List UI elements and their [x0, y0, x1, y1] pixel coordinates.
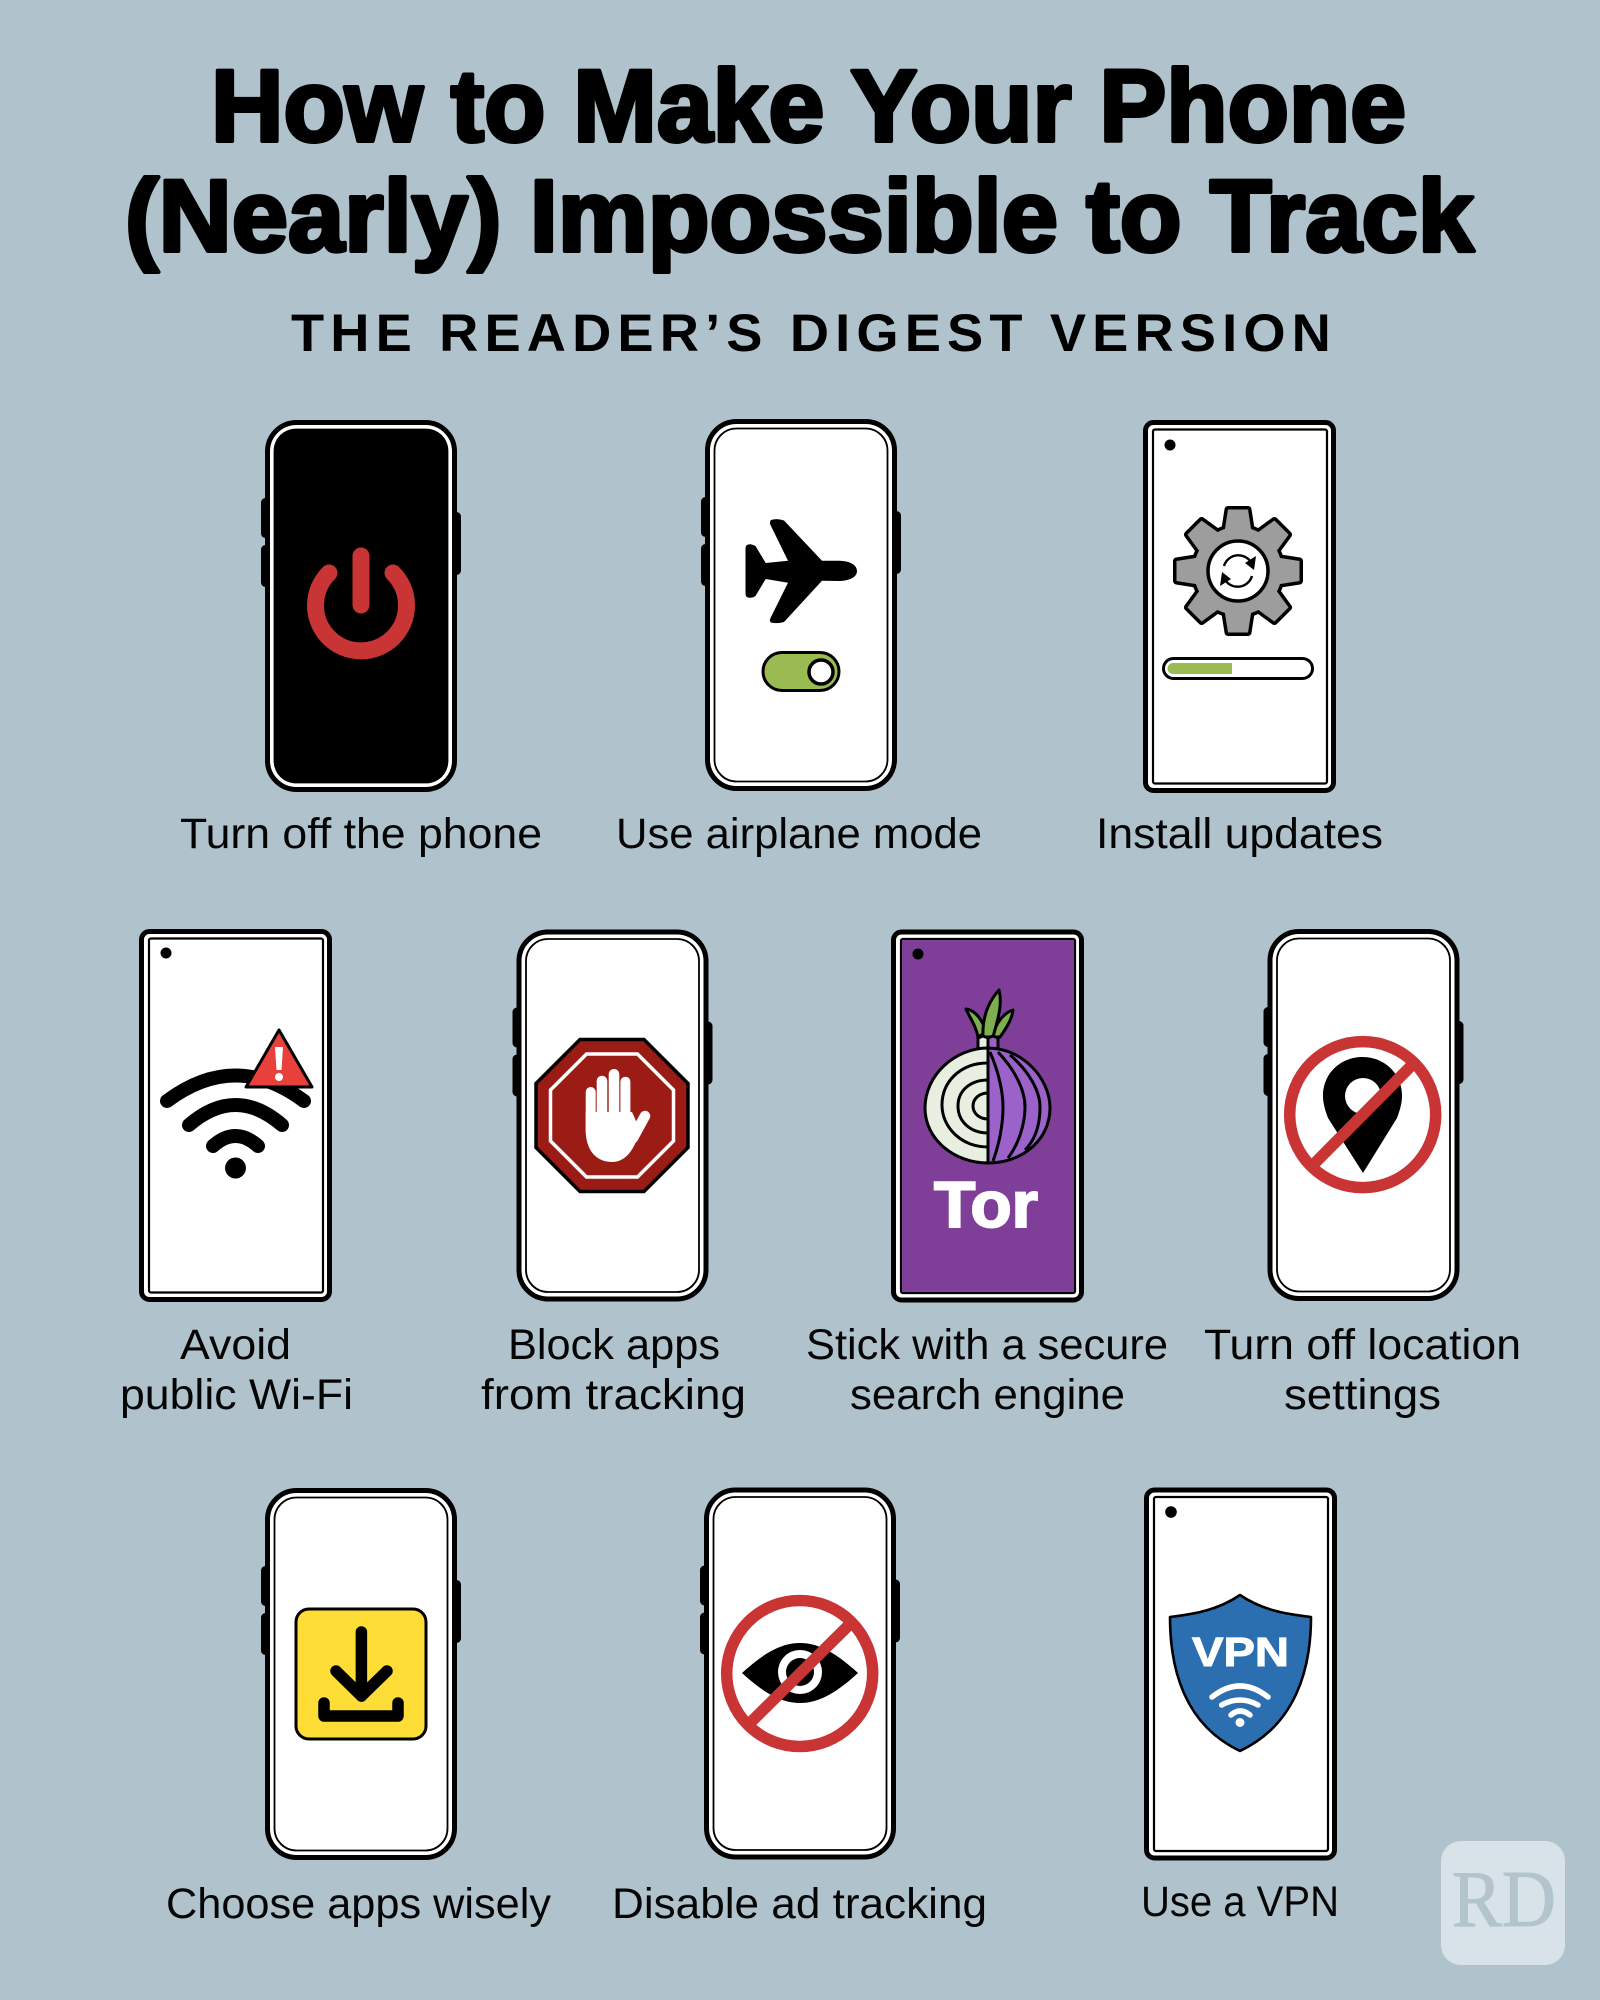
caption: [120, 1321, 353, 1419]
logo: RD: [1441, 1841, 1565, 1965]
panel: disable ad tracking: [612, 1490, 987, 1928]
caption: Use airplane mode: [616, 810, 982, 858]
caption: Turn off location: [1204, 1321, 1521, 1369]
Tor wordmark: Tor: [934, 1168, 1038, 1241]
caption: Turn off the phone: [180, 810, 542, 858]
logo: RD: RD: [1452, 1856, 1556, 1944]
title: [125, 49, 1474, 273]
icon: toggle switch: [763, 652, 839, 690]
panel: use airplane mode: [616, 422, 982, 858]
icon: airplane: [746, 519, 857, 623]
panel: choose apps wisely: [166, 1490, 551, 1928]
icon: onion: [925, 990, 1050, 1163]
caption: Install updates: [1096, 810, 1383, 858]
icon: prohibition sign: [1290, 1042, 1436, 1188]
phone purple screen: [901, 939, 1075, 1293]
phone frame: [261, 1490, 461, 1858]
icon: white hand: [586, 1069, 645, 1162]
icon: vpn shield: [1170, 1595, 1311, 1751]
icon: eye: [742, 1643, 858, 1703]
caption: [806, 1321, 1168, 1419]
caption: Block apps: [508, 1321, 720, 1369]
caption: from tracking: [481, 1371, 746, 1419]
phone frame: [1264, 932, 1464, 1298]
caption: Disable ad tracking: [612, 1880, 987, 1928]
panel: stick with a secure search engine: [806, 932, 1168, 1419]
progress bar: [1164, 658, 1312, 678]
caption: public Wi-Fi: [120, 1371, 353, 1419]
caption: settings: [1284, 1371, 1441, 1419]
icon: download app tile: [296, 1609, 426, 1739]
panel: avoid public wi-fi: [120, 932, 353, 1419]
title: (Nearly) Impossible to Track: [125, 159, 1474, 273]
panel: block apps from tracking: [481, 932, 746, 1419]
icon: power symbol: [316, 556, 407, 651]
panel: use a vpn: [1141, 1490, 1339, 1926]
caption: Avoid: [180, 1321, 291, 1369]
caption: [481, 1321, 746, 1419]
phone black screen: [274, 429, 448, 783]
icon: stop sign: [536, 1040, 688, 1192]
panel: install updates: [1096, 422, 1383, 858]
camera dot: [912, 948, 924, 960]
camera dot: [160, 948, 172, 958]
caption: Use a VPN: [1141, 1878, 1339, 1926]
icon: location pin: [1323, 1057, 1402, 1173]
phone frame: [1146, 422, 1334, 790]
camera dot: [1164, 440, 1176, 450]
icon: prohibition sign: [727, 1600, 873, 1746]
phone frame: [701, 422, 901, 788]
caption: search engine: [850, 1371, 1125, 1419]
subtitle: THE READER’S DIGEST VERSION: [291, 304, 1337, 363]
title: How to Make Your Phone: [211, 49, 1406, 163]
panel: turn off the phone: [180, 422, 542, 858]
phone frame: [512, 932, 712, 1299]
icon: warning triangle: [246, 1030, 312, 1087]
caption: Stick with a secure: [806, 1321, 1168, 1369]
phone frame: [261, 422, 461, 790]
phone frame: [894, 932, 1082, 1300]
icon: wi-fi: [167, 1076, 304, 1178]
camera dot: [1165, 1506, 1177, 1518]
phone frame: [142, 932, 330, 1300]
caption: Choose apps wisely: [166, 1880, 551, 1928]
icon: vpn shield: VPN: [1192, 1629, 1289, 1675]
icon: gear: [1176, 510, 1300, 632]
phone frame: [1146, 1490, 1334, 1858]
caption: [1204, 1321, 1521, 1419]
panel: turn off location settings: [1204, 932, 1521, 1419]
phone frame: [700, 1490, 900, 1857]
